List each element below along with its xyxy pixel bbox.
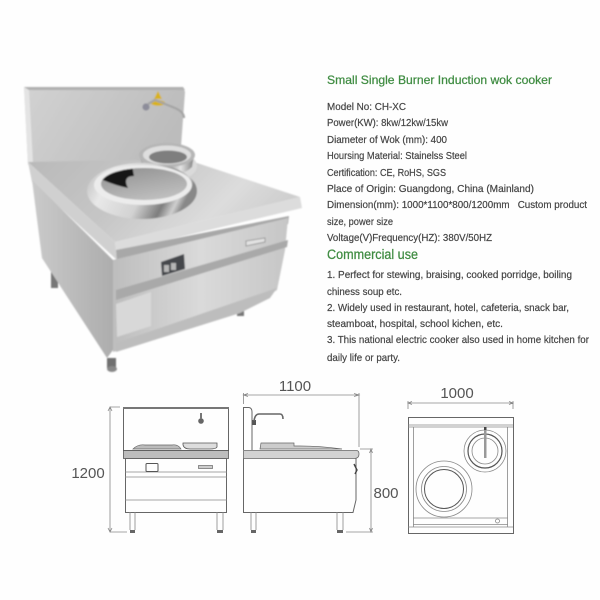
- cabinet: [126, 458, 226, 512]
- top outline: [408, 418, 514, 534]
- use 2: 2. Widely used in restaurant, hotel, cafeteria, snack bar,: [327, 302, 569, 314]
- technical drawing: side view: [244, 378, 399, 533]
- handle: [198, 466, 212, 468]
- large burner rings: [416, 461, 472, 517]
- specification list: [327, 101, 587, 244]
- cooking surface: [28, 160, 300, 242]
- heading: commercial use: Commercial use: [327, 247, 418, 262]
- spec: origin: Place of Origin: Guangdong, China (Mainland): [327, 183, 534, 195]
- wok tops: [133, 443, 217, 449]
- use 2 continued: steamboat, hospital, school kichen, etc.: [327, 318, 503, 330]
- width dimension 1100: [244, 378, 359, 447]
- spec: model: Model No: CH-XC: [327, 101, 406, 113]
- product photo: stainless induction wok cooker: [24, 87, 302, 372]
- left cabinet side: [32, 180, 113, 358]
- front cabinet: [113, 218, 288, 352]
- wok tops: [260, 443, 342, 449]
- main wok: [87, 163, 197, 219]
- small burner rings: [464, 427, 506, 472]
- top and bottom bands: [408, 425, 513, 527]
- technical drawing: top view: [408, 385, 514, 534]
- legs: [130, 512, 223, 533]
- spec: dimension continued: size, power size: [327, 216, 393, 228]
- counter: [124, 450, 228, 458]
- spec: voltage: Voltage(V)Frequency(HZ): 380V/50HZ: [327, 232, 493, 244]
- display outline: [146, 464, 158, 472]
- label 1000: 1000: [440, 385, 474, 402]
- digital control panel: [161, 254, 185, 276]
- drawer handle: [246, 238, 265, 246]
- label 1200: 1200: [71, 465, 105, 482]
- use 3: 3. This national electric cooker also used in home kitchen for: [327, 334, 589, 346]
- spec: wok diameter: Diameter of Wok (mm): 400: [327, 134, 447, 146]
- front leg: [107, 358, 117, 372]
- cabinet: [244, 458, 356, 512]
- backsplash panel: [24, 87, 185, 165]
- backsplash: [124, 408, 228, 450]
- rear ring pot: [139, 143, 197, 181]
- rear legs: [51, 270, 244, 316]
- label plate: [116, 292, 151, 337]
- left side rail: [28, 162, 117, 260]
- faucet mount: [198, 413, 204, 424]
- legs: [251, 512, 343, 533]
- spec: housing: Hoursing Material: Stainelss Steel: [327, 150, 467, 162]
- side handle: [354, 464, 357, 474]
- height dimension 1200: [108, 407, 127, 532]
- use 1 continued: chiness soup etc.: [327, 286, 402, 298]
- faucet: [252, 414, 283, 425]
- label 800: 800: [373, 485, 399, 502]
- spec: dimension: Dimension(mm): 1000*1100*800/1200mm Custom product: [327, 199, 587, 211]
- backsplash profile: [244, 408, 252, 450]
- spec: power: Power(KW): 8kw/12kw/15kw: [327, 117, 448, 129]
- height dimension 800: [346, 449, 399, 532]
- drain hole: [496, 519, 500, 523]
- counter: [244, 450, 359, 458]
- faucet with yellow warning label: [142, 91, 184, 118]
- width dimension 1000: [408, 385, 513, 409]
- use 3 continued: daily life or party.: [327, 352, 400, 364]
- commercial use list: [327, 269, 589, 364]
- label 1100: 1100: [279, 378, 311, 395]
- technical drawing: front view: [71, 407, 229, 533]
- use 1: 1. Perfect for stewing, braising, cooked porridge, boiling: [327, 269, 572, 281]
- heading: product name: Small Single Burner Induction wok cooker: [327, 73, 552, 87]
- front rail with darker band: [115, 197, 302, 262]
- spec: certification: Certification: CE, RoHS, SGS: [327, 167, 446, 179]
